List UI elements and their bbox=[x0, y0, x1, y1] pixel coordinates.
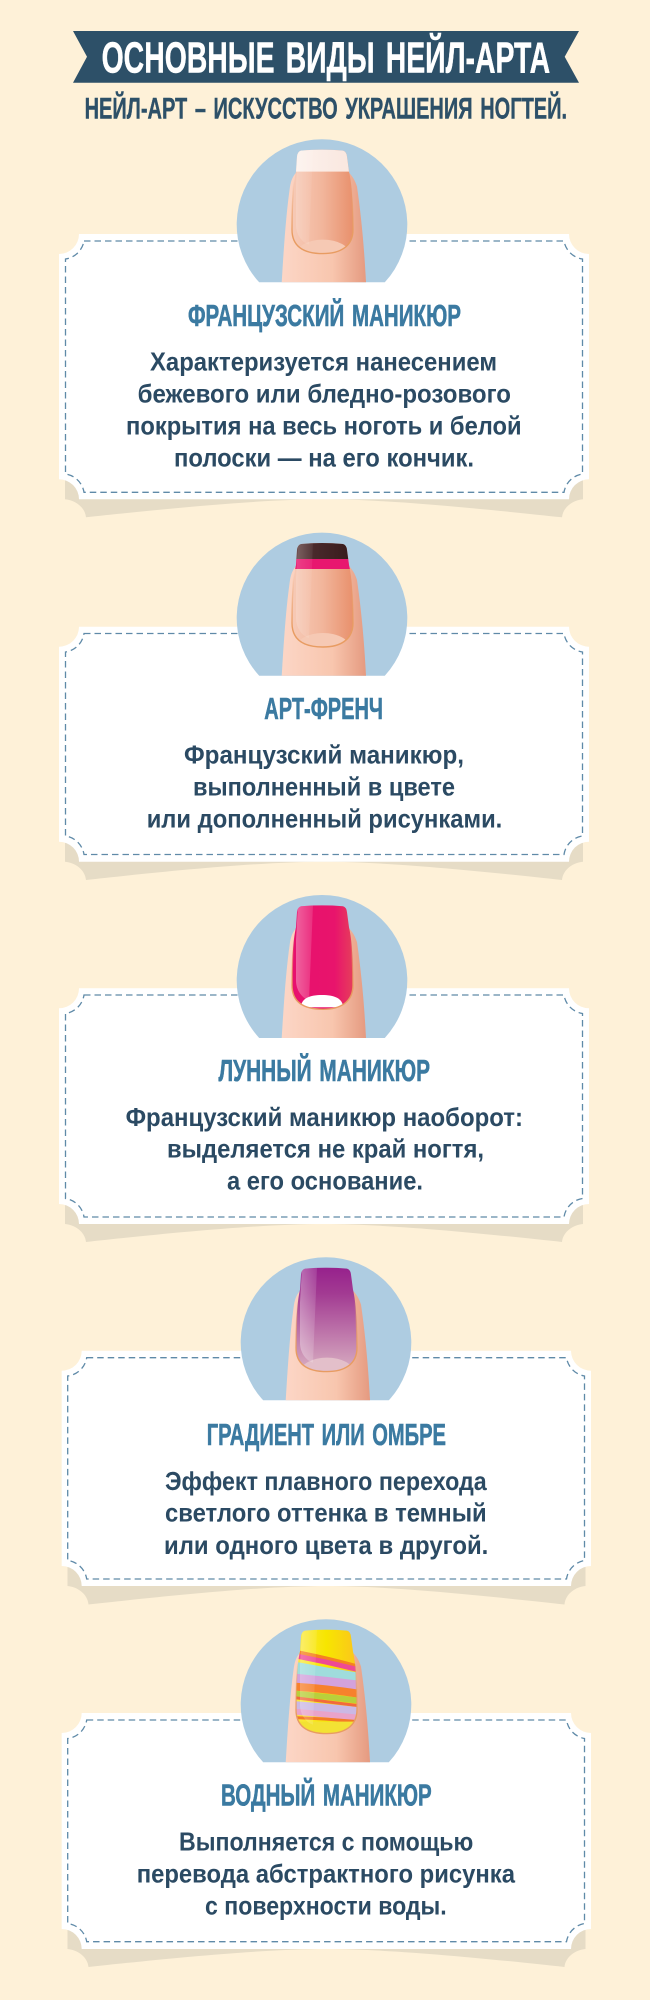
text: ombre description bbox=[164, 1466, 488, 1560]
text: ombre description: или одного цвета в другой. bbox=[164, 1530, 488, 1560]
text: water manicure description: перевода абстрактного рисунка bbox=[137, 1859, 515, 1889]
text: french manicure description: Характеризуется нанесением bbox=[150, 347, 497, 377]
panel: french manicure bbox=[59, 139, 589, 517]
heading: french manicure: ФРАНЦУЗСКИЙ МАНИКЮР bbox=[188, 297, 461, 333]
text: water manicure description: Выполняется с помощью bbox=[179, 1827, 473, 1857]
heading: moon manicure: ЛУННЫЙ МАНИКЮР bbox=[218, 1052, 430, 1088]
text: art french description: выполненный в цвете bbox=[193, 772, 455, 802]
heading: water manicure: ВОДНЫЙ МАНИКЮР bbox=[221, 1777, 432, 1813]
panel: moon manicure bbox=[59, 895, 589, 1242]
text: art french description: Французский маникюр, bbox=[184, 740, 464, 770]
panel: art french bbox=[59, 533, 589, 880]
text: moon manicure description: а его основание. bbox=[227, 1165, 423, 1195]
text: ombre description: Эффект плавного перехода bbox=[165, 1466, 487, 1496]
text: french manicure description: полоски — на его кончик. bbox=[174, 443, 474, 473]
text: art french description bbox=[147, 740, 502, 833]
text: french manicure description: покрытия на весь ноготь и белой bbox=[126, 411, 522, 441]
text: art french description: или дополненный рисунками. bbox=[147, 803, 502, 833]
icon: french nail bbox=[237, 139, 407, 282]
text: moon manicure description: Французский маникюр наоборот: bbox=[126, 1102, 523, 1132]
icon: water marble nail bbox=[241, 1619, 411, 1762]
text: moon manicure description: выделяется не край ногтя, bbox=[167, 1134, 484, 1164]
text: french manicure description: бежевого или бледно-розового bbox=[138, 379, 511, 409]
icon: art french nail bbox=[237, 533, 407, 676]
text: french manicure description bbox=[126, 347, 522, 473]
text: moon manicure description bbox=[126, 1102, 523, 1195]
text: ombre description: светлого оттенка в темный bbox=[165, 1498, 487, 1528]
text: water manicure description bbox=[137, 1827, 515, 1920]
icon: moon nail bbox=[237, 895, 407, 1038]
heading: art french: АРТ-ФРЕНЧ bbox=[264, 691, 383, 726]
heading: gradient or ombre: ГРАДИЕНТ ИЛИ ОМБРЕ bbox=[207, 1417, 446, 1452]
text: water manicure description: с поверхности воды. bbox=[205, 1890, 447, 1920]
panel: water manicure bbox=[62, 1619, 591, 1967]
panel: gradient or ombre bbox=[62, 1257, 591, 1604]
icon: ombre nail bbox=[241, 1257, 411, 1400]
